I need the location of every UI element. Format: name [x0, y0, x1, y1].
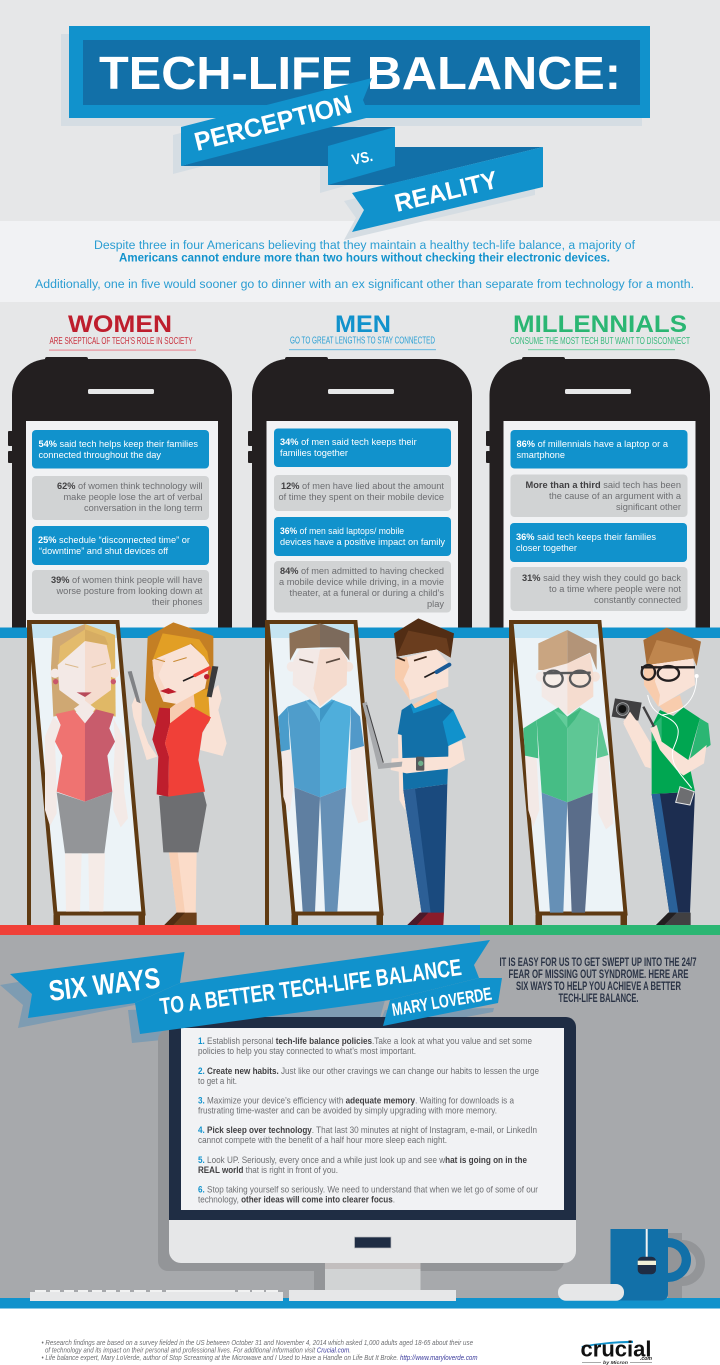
- card: 36% positive impact: 36% of men said laptops/ mobile: [280, 526, 404, 537]
- banner text: to a better tech-life balance: TO A BETTER TECH-LIFE BALANCE: [158, 954, 463, 1019]
- tip 1: 1. Establish personal tech-life balance policies.Take a look at what you value and set some: [198, 1036, 532, 1046]
- banner text: six ways: SIX WAYS: [47, 963, 162, 1008]
- column heading: men: MEN: [335, 311, 391, 338]
- tip 4: cannot compete with the benefit of a half hour more sleep each night.: [198, 1135, 447, 1145]
- tip 3: frustrating time-waster and can be avoided by simply upgrading with more memory.: [198, 1106, 497, 1116]
- footnotes: • Research findings are based on a survey fielded in the US between October 31 and November 4, 2014 which asked 1,000 adults aged 18-65 about their use: [42, 1340, 473, 1347]
- tea bag tag: [638, 1257, 656, 1274]
- card: 31% wish go back: to a time where people were not: [549, 584, 681, 595]
- mirror: millennials: [509, 620, 627, 925]
- card: 36% closer together: [510, 523, 687, 562]
- tip 3: 3. Maximize your device’s efficiency with adequate memory. Waiting for downloads is a: [198, 1096, 515, 1106]
- ribbon text: vs: VS.: [350, 148, 374, 169]
- tip 6: 6. Stop taking yourself so seriously. We need to understand that when we let go of some of our: [198, 1184, 538, 1194]
- intro paragraph line 3: Additionally, one in five would sooner go to dinner with an ex significant other than separate from technology for a month.: [35, 279, 694, 291]
- side text: fear of missing out: TECH-LIFE BALANCE.: [558, 993, 638, 1005]
- tip 1: policies to help you stay connected to what’s most important.: [198, 1046, 416, 1056]
- figure: man reflection: [278, 623, 368, 912]
- card: 36% closer together: closer together: [516, 543, 577, 554]
- ribbon text: perception: PERCEPTION: [191, 89, 355, 157]
- card: 86% laptop or smartphone: [510, 430, 688, 468]
- footnotes: of technology and its impact on their personal and professional lives. For additional information visit Crucial.com.: [45, 1348, 351, 1354]
- card: more than a third argument: [510, 474, 688, 517]
- card: 25% disconnected time: “downtime” and shut devices off: [39, 546, 168, 557]
- card: 36% positive impact: devices have a positive impact on family: [280, 537, 445, 548]
- card: 34% families together: families together: [280, 448, 348, 459]
- card: 31% wish go back: 31% said they wish they could go back: [522, 573, 681, 584]
- card: 39% worse posture: their phones: [152, 597, 203, 608]
- card: 54% families connected: [32, 430, 209, 468]
- ribbon banner: [10, 940, 502, 1034]
- figure: woman reflection: [45, 624, 128, 912]
- phone: millennials: [486, 357, 710, 630]
- tip 2: [198, 1066, 539, 1086]
- card: 84% checked device: [274, 561, 451, 612]
- card: 25% disconnected time: 25% schedule “disconnected time” or: [38, 535, 190, 546]
- column heading: women: [49, 311, 196, 351]
- card: more than a third argument: significant other: [616, 502, 681, 513]
- intro paragraph bold line: Americans cannot endure more than two hours without checking their electronic devices.: [119, 252, 610, 264]
- tip 3: [198, 1096, 515, 1116]
- figure: woman: [128, 622, 227, 925]
- card: 54% families connected: connected throughout the day: [38, 450, 161, 461]
- column heading: women: WOMEN: [68, 311, 172, 338]
- card: 12% lied about time: 12% of men have lied about the amount: [281, 481, 444, 492]
- desk band: [0, 1298, 720, 1308]
- tip 4: 4. Pick sleep over technology. That last 30 minutes at night of Instagram, e-mail, or LinkedIn: [198, 1125, 537, 1135]
- keyboard: [30, 1291, 283, 1301]
- card: 31% wish go back: constantly connected: [594, 595, 681, 606]
- logo: crucial by micron: .com: [640, 1356, 652, 1362]
- column heading: men: GO TO GREAT LENGTHS TO STAY CONNECTED: [290, 336, 435, 346]
- card: 39% worse posture: 39% of women think people will have: [51, 575, 202, 586]
- card: 62% lose art of conversation: [32, 476, 209, 520]
- card: 86% laptop or smartphone: 86% of millennials have a laptop or a: [516, 439, 669, 450]
- column heading: millennials: [510, 311, 690, 350]
- card: 39% worse posture: [32, 570, 209, 614]
- lower section background: [0, 935, 720, 1298]
- card: 39% worse posture: worse posture from looking down at: [56, 586, 203, 597]
- ribbon shadows: [0, 975, 494, 1043]
- footnotes: • Life balance expert, Mary LoVerde, author of Stop Screaming at the Microwave and I Used to Have a Handle on Life But It Broke. http://www.maryloverde.com: [42, 1355, 478, 1362]
- column heading: women: ARE SKEPTICAL OF TECH'S ROLE IN SOCIETY: [50, 336, 193, 347]
- monitor: [158, 1017, 576, 1291]
- card: 84% checked device: play: [427, 599, 444, 610]
- card: more than a third argument: More than a third said tech has been: [526, 480, 681, 491]
- mouse: [558, 1284, 624, 1301]
- tip 2: to get a hit.: [198, 1076, 237, 1086]
- column heading: millennials: MILLENNIALS: [513, 311, 687, 338]
- subtitle ribbons: [173, 78, 543, 240]
- card: 62% lose art of conversation: 62% of women think technology will: [57, 481, 202, 492]
- card: 54% families connected: 54% said tech helps keep their families: [38, 439, 198, 450]
- mirror: women: [27, 620, 145, 925]
- tip 6: [198, 1184, 538, 1204]
- footnotes: [42, 1340, 478, 1362]
- card: 34% families together: 34% of men said tech keeps their: [280, 437, 417, 448]
- logo: crucial by micron: by Micron: [603, 1360, 628, 1365]
- tip 6: technology, other ideas will come into clearer focus.: [198, 1194, 395, 1204]
- mirror: men: [265, 620, 383, 925]
- title block: [61, 26, 650, 126]
- intro text band: [0, 221, 720, 302]
- logo: crucial by micron: crucial: [580, 1337, 652, 1362]
- monitor base: [289, 1290, 456, 1301]
- card: 62% lose art of conversation: conversation in the long term: [84, 503, 203, 514]
- tip 5: 5. Look UP. Seriously, every once and a while just look up and see what is going on in the: [198, 1155, 527, 1165]
- column heading: men: [289, 311, 436, 350]
- card: 36% closer together: 36% said tech keeps their families: [516, 532, 656, 543]
- monitor stand: [325, 1263, 420, 1290]
- card: 84% checked device: theater, at a funeral or during a child’s: [290, 588, 444, 599]
- card: 12% lied about time: of time they spent on their mobile device: [278, 492, 444, 503]
- phone: women: [8, 357, 232, 630]
- tip 5: REAL world that is right in front of you.: [198, 1165, 338, 1175]
- floor area background: [0, 628, 720, 935]
- card: more than a third argument: the cause of an argument with a: [549, 491, 682, 502]
- intro paragraph line 1: Despite three in four Americans believing that they maintain a healthy tech-life balance, a majority of: [94, 240, 636, 252]
- tip 4: [198, 1125, 537, 1145]
- coffee mug: [610, 1229, 700, 1300]
- figure: millennial: [612, 628, 711, 925]
- card: 84% checked device: 84% of men admitted to having checked: [280, 566, 444, 577]
- card: 86% laptop or smartphone: smartphone: [516, 450, 565, 461]
- figure: millennial reflection: [523, 630, 613, 913]
- phone: men: [248, 357, 472, 630]
- figure: man: [362, 618, 466, 925]
- tip 1: [198, 1036, 532, 1056]
- title text: TECH-LIFE BALANCE:: [99, 47, 621, 99]
- card: 36% positive impact: [274, 517, 451, 556]
- card: 31% wish go back: [510, 567, 688, 611]
- card: 12% lied about time: [274, 475, 451, 511]
- tip 2: 2. Create new habits. Just like our other cravings we can change our habits to lessen the urge: [198, 1066, 539, 1076]
- ribbon text: reality: REALITY: [392, 166, 501, 218]
- card: 62% lose art of conversation: make people lose the art of verbal: [64, 492, 202, 503]
- card: 25% disconnected time: [32, 526, 209, 565]
- side text: fear of missing out: [500, 957, 696, 1005]
- tip 5: [198, 1155, 527, 1175]
- card: 84% checked device: a mobile device while driving, in a movie: [279, 577, 444, 588]
- banner text: mary loverde: MARY LOVERDE: [390, 984, 493, 1020]
- card: 34% families together: [274, 428, 451, 467]
